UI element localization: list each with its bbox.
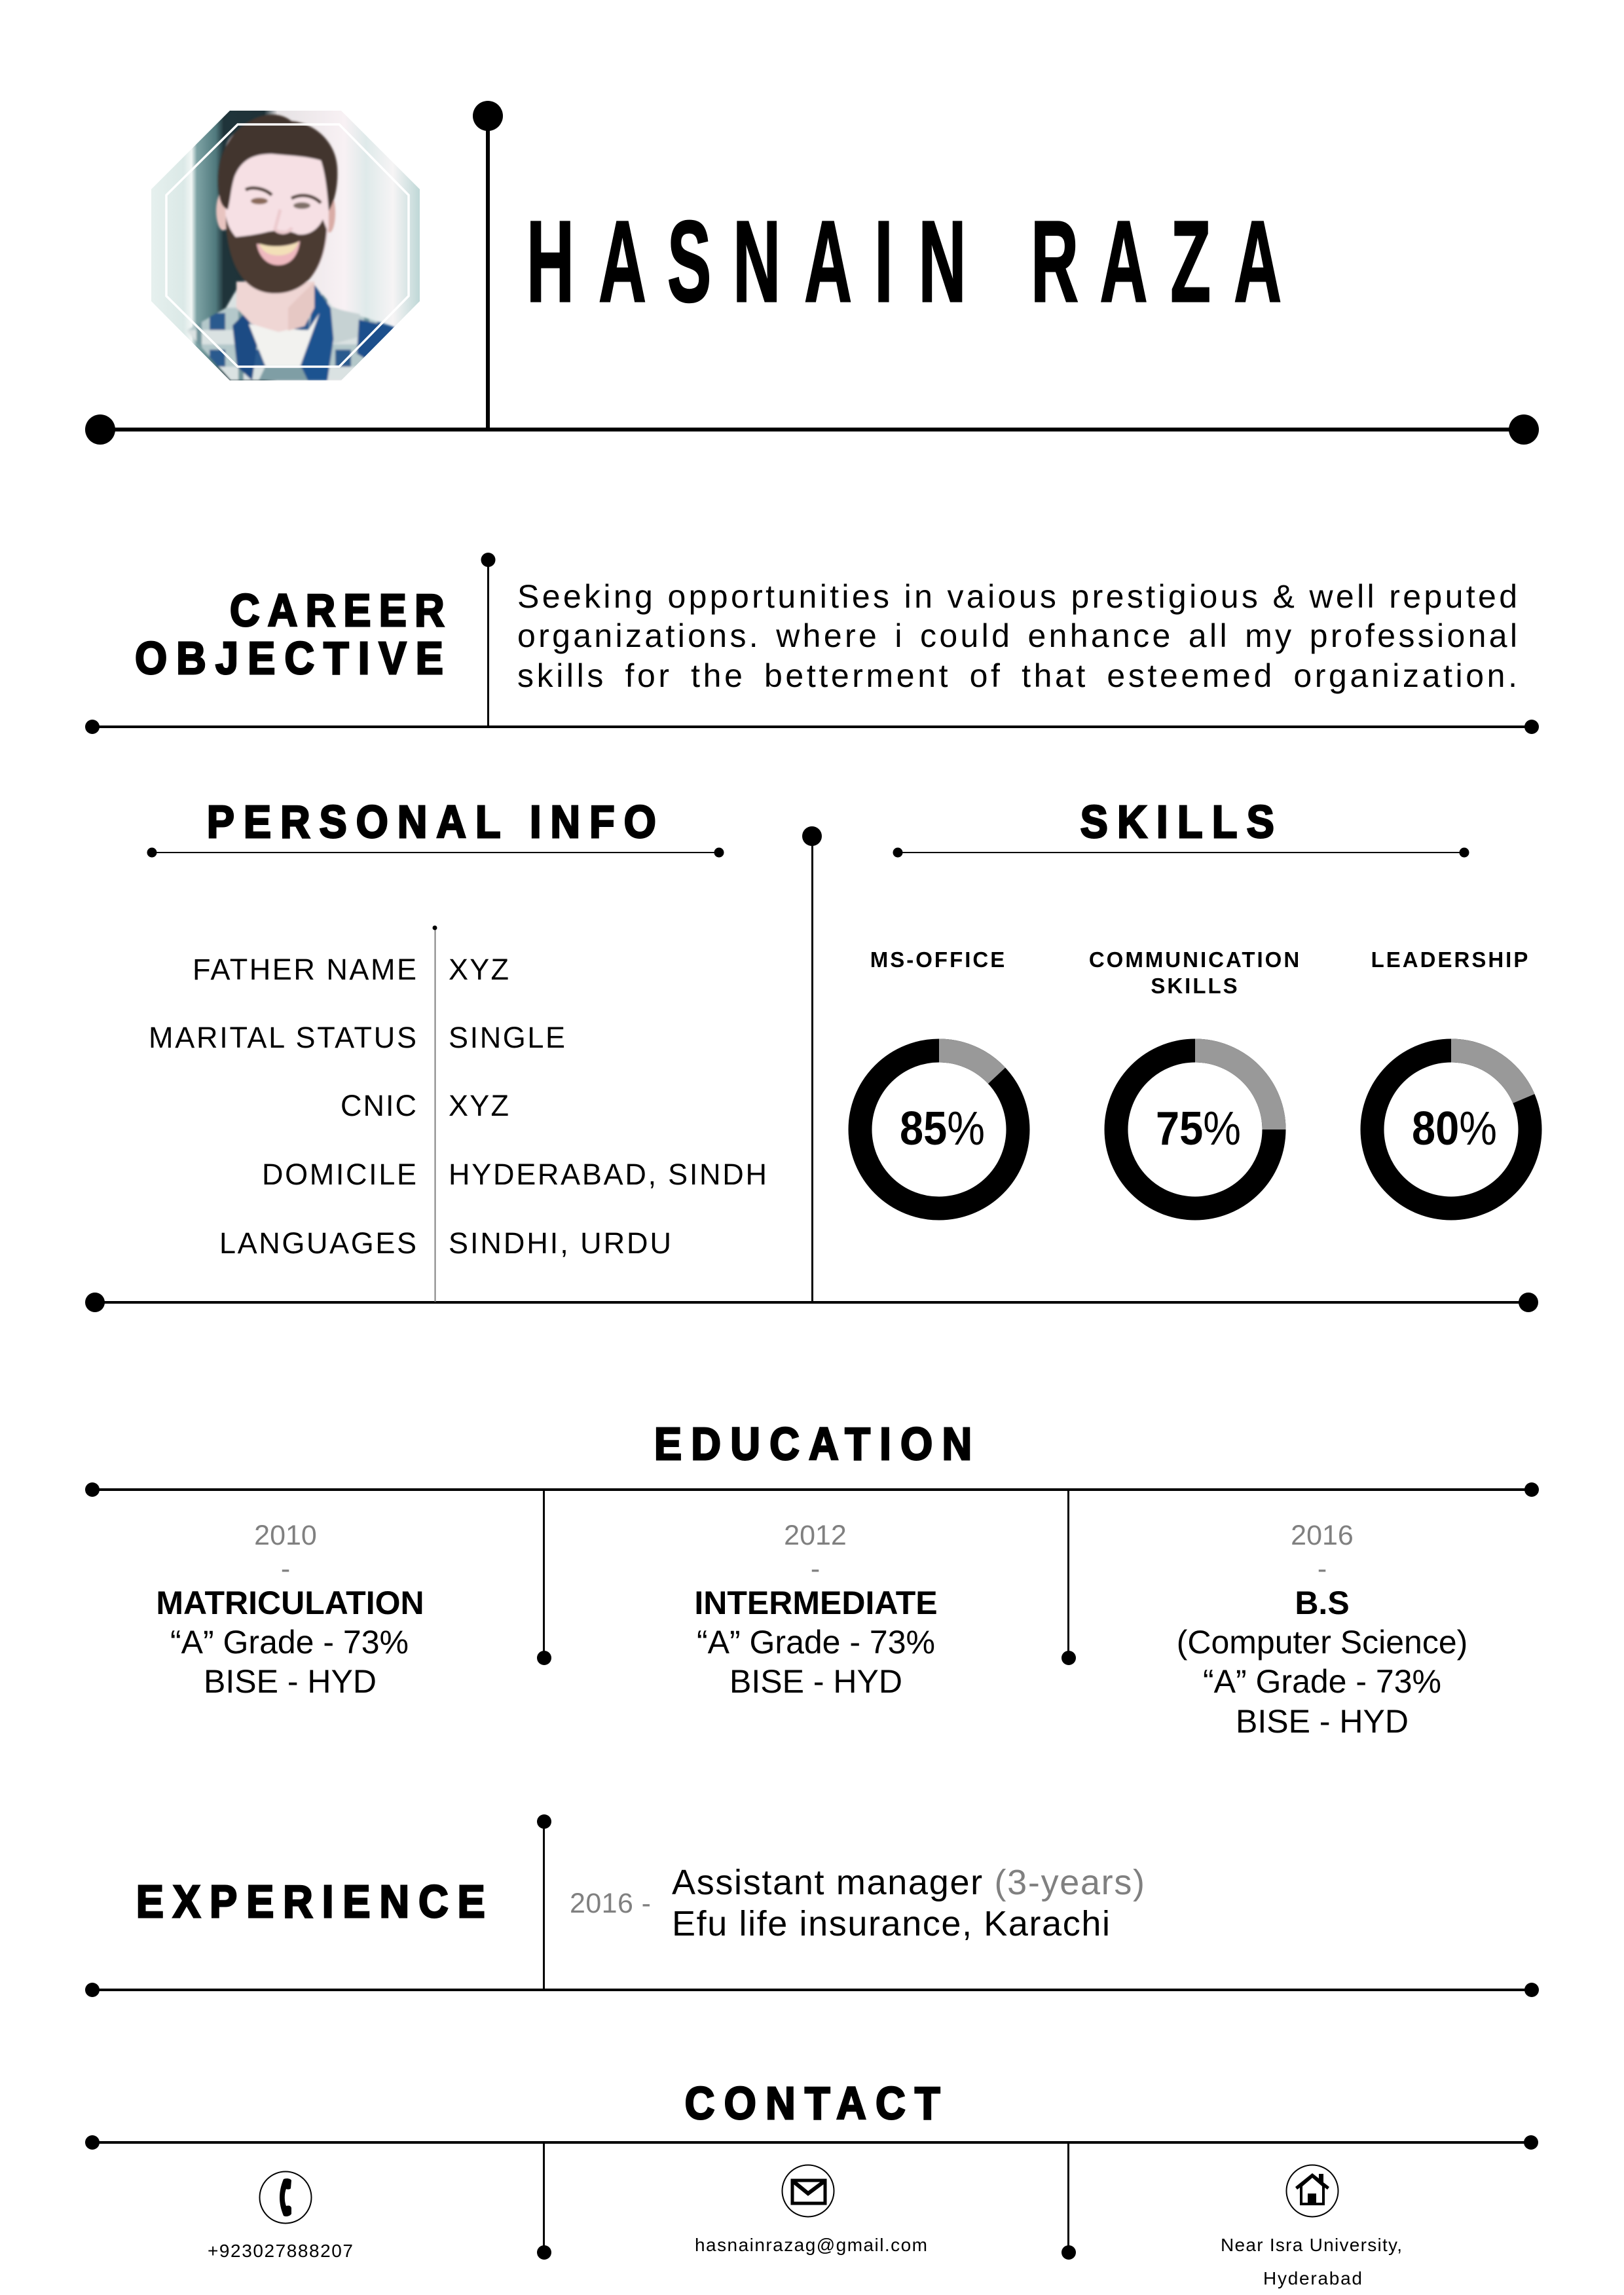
personal info list: MARITAL STATUS <box>149 1021 416 1054</box>
personal info list: CNIC <box>341 1089 416 1122</box>
experience text <box>570 1863 1145 1943</box>
title: name: HASNAIN RAZA <box>526 198 1282 326</box>
education: matriculation: MATRICULATION <box>156 1585 424 1621</box>
beard <box>226 216 327 293</box>
section timeline: personal and skills <box>85 826 1538 1312</box>
donut chart: leadership 80%: 80% <box>1412 1103 1497 1155</box>
email address: hasnainrazag@gmail.com <box>695 2235 927 2255</box>
experience text: Assistant manager (3-years) <box>672 1863 1145 1902</box>
heading: education: EDUCATION <box>654 1419 972 1470</box>
eyes <box>251 198 268 204</box>
heading: skills <box>893 797 1469 858</box>
skill labels: LEADERSHIP <box>1371 947 1530 972</box>
hair <box>218 115 337 211</box>
education: matriculation: - <box>281 1553 290 1585</box>
neck <box>236 282 314 332</box>
education: b.s <box>1177 1520 1467 1740</box>
education: matriculation: BISE - HYD <box>204 1663 377 1700</box>
donut chart: ms-office 85%: 85% <box>900 1103 985 1155</box>
address: Hyderabad <box>1263 2268 1362 2288</box>
text block: objective paragraph: Seeking opportunities in vaious prestigious & well reputed <box>517 578 1517 615</box>
education: b.s: “A” Grade - 73% <box>1203 1663 1441 1700</box>
donut chart: leadership 80% <box>1373 1050 1530 1209</box>
personal info list: XYZ <box>449 1089 509 1122</box>
text block: objective paragraph: skills for the betterment of that esteemed organization. <box>517 657 1517 694</box>
education: b.s: (Computer Science) <box>1177 1624 1467 1661</box>
education: intermediate: INTERMEDIATE <box>694 1585 938 1621</box>
icon: email <box>782 2165 834 2217</box>
skill labels: COMMUNICATION <box>1089 947 1301 972</box>
personal info list: SINDHI, URDU <box>449 1226 671 1260</box>
heading: skills: SKILLS <box>1080 797 1274 848</box>
education: b.s: 2016 <box>1291 1520 1354 1551</box>
donut chart: ms-office 85% <box>860 1050 1018 1209</box>
personal info list: DOMICILE <box>262 1158 416 1191</box>
education timeline <box>85 1482 1539 1665</box>
phone number: +923027888207 <box>208 2241 353 2261</box>
education: matriculation <box>156 1520 424 1700</box>
donut chart: communication 75%: 75% <box>1156 1103 1241 1155</box>
brows <box>246 188 272 195</box>
heading: personal info: PERSONAL INFO <box>207 797 656 848</box>
education: b.s: B.S <box>1295 1585 1350 1621</box>
personal info list: SINGLE <box>449 1021 565 1054</box>
personal info list <box>149 926 767 1302</box>
experience text: 2016 - <box>570 1888 651 1919</box>
contact timeline <box>85 2135 1538 2260</box>
education: matriculation: “A” Grade - 73% <box>170 1624 409 1661</box>
text block: objective paragraph: organizations. where i could enhance all my professional <box>517 617 1517 654</box>
heading: career objective: CAREER <box>230 585 445 636</box>
heading: career objective <box>135 585 445 684</box>
icon: home <box>1286 2165 1338 2217</box>
education: matriculation: 2010 <box>254 1520 317 1551</box>
personal info list: HYDERABAD, SINDH <box>449 1158 767 1191</box>
personal info list: LANGUAGES <box>219 1226 416 1260</box>
photo: portrait in octagon frame <box>151 111 420 380</box>
heading: contact: CONTACT <box>685 2078 940 2129</box>
skill labels: MS-OFFICE <box>870 947 1006 972</box>
education: intermediate: “A” Grade - 73% <box>697 1624 935 1661</box>
education: intermediate <box>694 1520 938 1700</box>
heading: career objective: OBJECTIVE <box>135 633 443 684</box>
personal info list: FATHER NAME <box>193 953 416 986</box>
education: intermediate: - <box>811 1553 820 1585</box>
education: intermediate: 2012 <box>784 1520 847 1551</box>
experience text: Efu life insurance, Karachi <box>672 1904 1110 1943</box>
shirt <box>187 285 396 380</box>
header timeline <box>85 101 1539 445</box>
text block: objective paragraph <box>517 578 1517 694</box>
face <box>225 134 330 276</box>
education: b.s: - <box>1318 1553 1327 1585</box>
donut chart: communication 75% <box>1116 1050 1274 1209</box>
experience timeline <box>85 1814 1539 1997</box>
heading: experience: EXPERIENCE <box>136 1877 485 1928</box>
heading: personal info <box>147 797 724 858</box>
career objective timeline <box>85 553 1539 734</box>
icon: phone <box>259 2171 312 2224</box>
education: b.s: BISE - HYD <box>1236 1703 1409 1740</box>
personal info list: XYZ <box>449 953 509 986</box>
education: intermediate: BISE - HYD <box>729 1663 902 1700</box>
address <box>1221 2235 1402 2288</box>
address: Near Isra University, <box>1221 2235 1402 2255</box>
nose <box>275 210 292 232</box>
skill labels <box>870 947 1530 998</box>
photo: inner white octagon outline <box>166 124 409 367</box>
skill labels: SKILLS <box>1151 974 1240 998</box>
